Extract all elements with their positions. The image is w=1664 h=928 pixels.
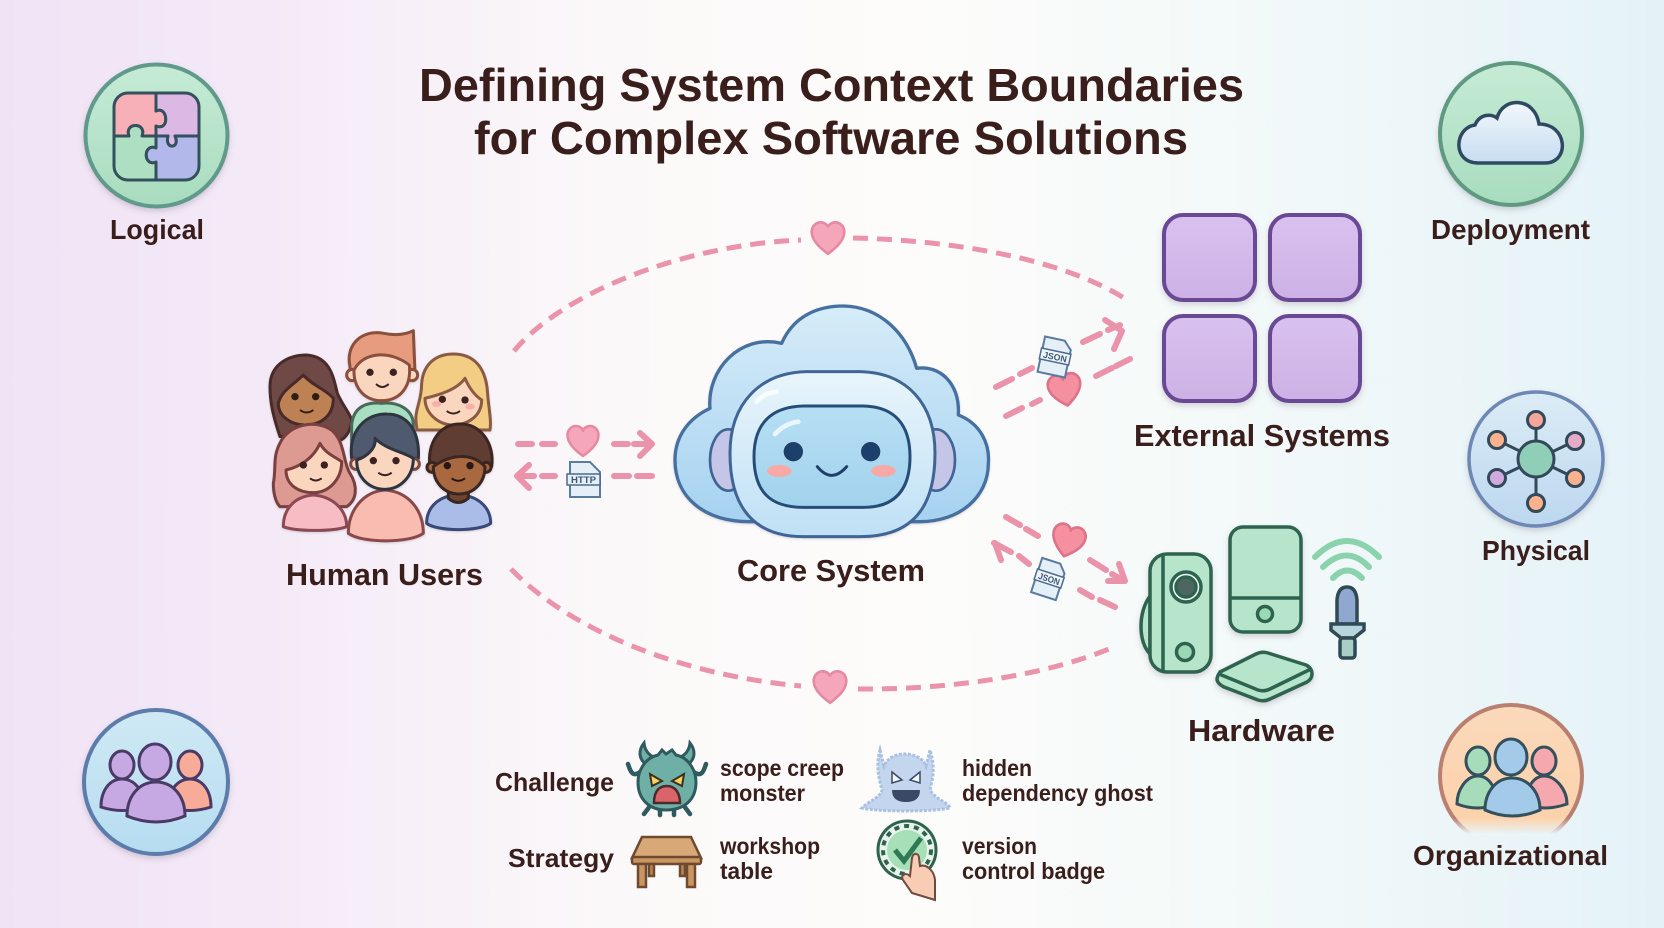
icon: purple group	[101, 744, 211, 822]
panel: deployment viewpoint	[1431, 63, 1590, 245]
panel: physical viewpoint	[1469, 392, 1603, 566]
panel: core system	[675, 306, 989, 588]
icon: JSON file upper: JSON	[1042, 350, 1068, 364]
text: scope creep monster: scope creep	[720, 755, 844, 781]
legend	[495, 743, 1153, 900]
label: Physical: Physical	[1482, 535, 1590, 566]
arrows: users to core	[517, 426, 652, 488]
camera	[1141, 554, 1211, 672]
panel: human users	[270, 331, 492, 592]
title: for Complex Software Solutions	[474, 112, 1188, 164]
text: workshop table: workshop	[719, 833, 820, 859]
panel: external systems	[1134, 215, 1390, 453]
label: Logical: Logical	[110, 214, 204, 245]
text: hidden dependency ghost: hidden	[962, 755, 1032, 781]
arc: bottom dashed connection	[511, 569, 1116, 689]
text: version control badge: control badge	[962, 858, 1105, 884]
label: Core System: Core System	[737, 553, 925, 588]
arrows: core to hardware	[994, 517, 1125, 607]
wifi waves	[1315, 541, 1379, 578]
icon: version control badge	[878, 821, 936, 900]
title: Defining System Context Boundaries	[419, 59, 1244, 111]
people illustration	[270, 331, 492, 541]
text: hidden dependency ghost: dependency ghost	[962, 780, 1153, 806]
title	[419, 59, 1244, 164]
text: workshop table: table	[720, 858, 773, 884]
panel: unnamed people viewpoint	[84, 710, 228, 854]
text: scope creep monster: monster	[720, 780, 805, 806]
icon: HTTP file: HTTP	[571, 475, 596, 485]
arc: top dashed connection	[514, 238, 1124, 351]
label: External Systems: External Systems	[1134, 418, 1390, 453]
icon: heart on hardware link	[1048, 522, 1088, 560]
panel: hardware	[1141, 527, 1379, 748]
icon: top heart	[812, 222, 844, 254]
label: Human Users: Human Users	[286, 557, 483, 592]
icon: JSON file upper	[1037, 336, 1073, 378]
legend row label: Strategy: Strategy	[508, 843, 615, 873]
icon: workshop table	[632, 837, 701, 887]
robot cloud mascot	[675, 306, 989, 537]
icon: network hub	[1488, 412, 1584, 512]
label: Hardware: Hardware	[1188, 713, 1335, 748]
device cluster	[1141, 527, 1312, 701]
icon: scope creep monster	[628, 743, 706, 815]
icon: cloud	[1459, 103, 1562, 163]
microphone	[1331, 587, 1364, 658]
arrows: core to external systems	[996, 320, 1130, 416]
text: version control badge: version	[962, 833, 1037, 859]
icon: HTTP file	[567, 462, 600, 497]
icon: hidden dependency ghost	[862, 750, 950, 811]
tablet	[1230, 527, 1301, 632]
router	[1217, 652, 1312, 701]
tile grid	[1164, 215, 1360, 401]
panel: logical viewpoint	[86, 64, 228, 245]
icon: puzzle	[114, 93, 199, 180]
icon: heart on link	[567, 426, 599, 456]
icon: heart on external link	[1046, 372, 1084, 408]
label: Deployment: Deployment	[1431, 214, 1590, 245]
icon: coloured group	[1457, 739, 1567, 816]
label: Organizational: Organizational	[1413, 840, 1608, 871]
icon: JSON file lower	[1030, 558, 1068, 600]
panel: organizational viewpoint	[1413, 705, 1608, 871]
legend row label: Challenge: Challenge	[495, 767, 614, 797]
icon: JSON file lower: JSON	[1037, 571, 1061, 587]
icon: bottom heart	[814, 671, 846, 703]
